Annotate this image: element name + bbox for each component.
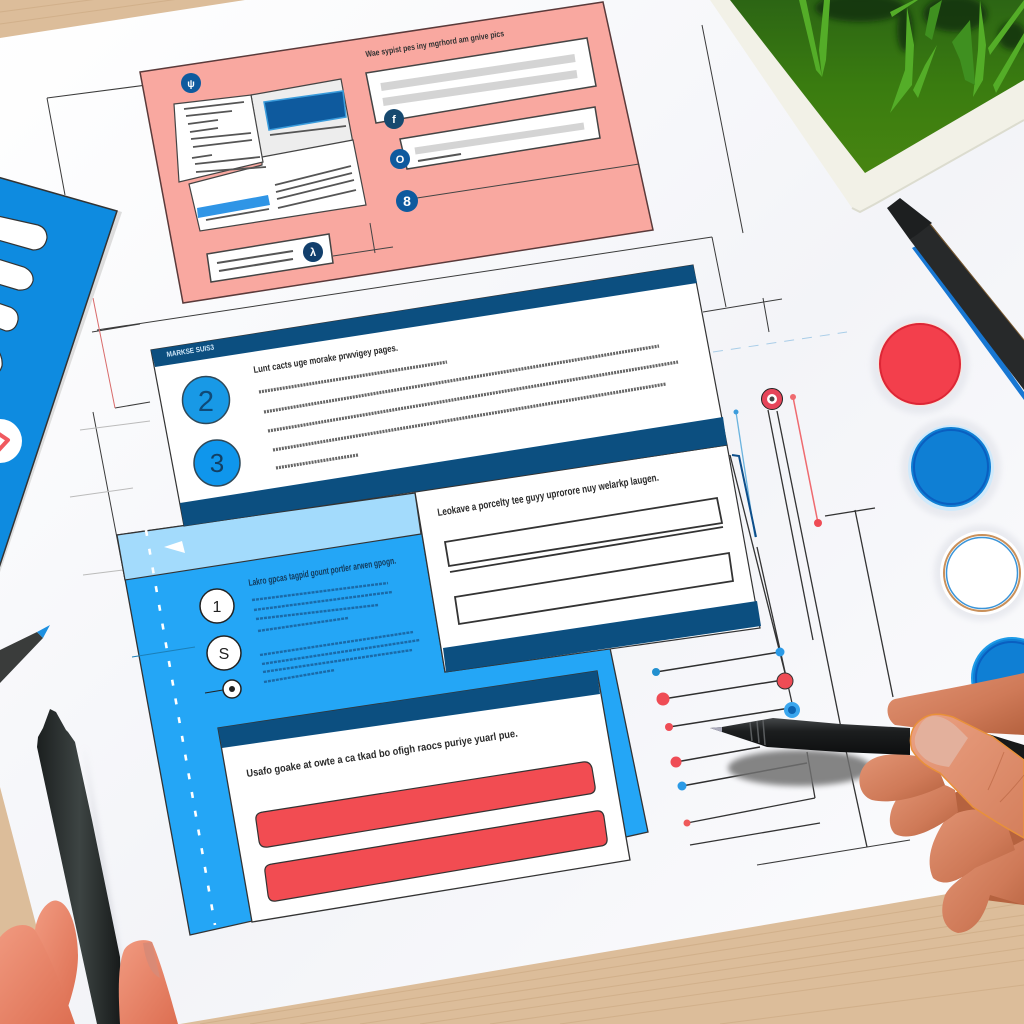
- red ring marker top: [762, 388, 782, 410]
- wireframe document: [174, 79, 366, 231]
- number badge: [396, 190, 418, 212]
- step 1: 1: [213, 599, 222, 616]
- panel: pink top section: [140, 2, 653, 303]
- construction guide lines: [47, 25, 910, 865]
- timeline connectors: [652, 388, 893, 847]
- panel: blue lower section: [117, 493, 648, 935]
- step 3: [194, 440, 240, 486]
- thumb: [910, 714, 1024, 838]
- navy header label: MARKSE SUIS3: [166, 343, 215, 359]
- swatch red: [871, 316, 969, 414]
- form field two: [455, 553, 733, 624]
- pen shadow: [728, 750, 872, 786]
- dark grass shadows: [815, 0, 1024, 52]
- leader lines: [333, 164, 639, 256]
- step S: S: [219, 646, 229, 663]
- hand lower left: [0, 901, 178, 1024]
- step 3: 3: [210, 448, 224, 478]
- blue panel heading: Lakro gpcas tagpid gount portler arwen gpogn.: [248, 556, 397, 589]
- grass tray: [710, 0, 1024, 212]
- inner card heading: Usafo goake at owte a ca tkad bo ofigh raocs puriye yuarl pue.: [246, 728, 518, 780]
- form heading: Leokave a porcelty tee guyy uprorore nuy welarkp laugen.: [437, 472, 660, 519]
- white text box two: [400, 107, 600, 169]
- swatch white ring: [934, 525, 1024, 621]
- swatch blue partial: [972, 638, 1024, 718]
- white text box one: [366, 38, 596, 123]
- inner white card: [218, 671, 630, 922]
- icon badge: [384, 109, 404, 129]
- blue panel paragraph two: [260, 632, 420, 682]
- swatch blue: [901, 418, 1001, 518]
- dashed guide: [146, 530, 215, 925]
- icon badge: ψ: [187, 79, 195, 90]
- lower fingers: [859, 754, 1024, 933]
- card badge icon: [0, 419, 22, 463]
- step dot: [205, 680, 241, 698]
- form field one: [445, 498, 723, 572]
- navy footer bar: [180, 417, 727, 526]
- arrow marker: [164, 541, 185, 553]
- pen far left: [0, 625, 50, 683]
- step 1: [200, 589, 234, 623]
- step S: [207, 636, 241, 670]
- blue card on left edge: [0, 176, 122, 590]
- step 2: [182, 376, 230, 424]
- grass blades: [799, 0, 1024, 113]
- index finger: [888, 673, 1024, 735]
- step 2: 2: [198, 386, 214, 418]
- red ring marker lower: [777, 673, 793, 689]
- section heading: Lunt cacts uge morake prwvigey pages.: [253, 343, 399, 376]
- marker dots: [652, 394, 822, 826]
- icon badge: λ: [310, 247, 316, 259]
- thumbnail: [915, 716, 968, 767]
- palm: [950, 760, 1024, 905]
- panel: navy header section: [151, 265, 727, 526]
- horizontal pen: [710, 718, 1024, 760]
- colour swatches: [871, 316, 1024, 718]
- icon badge: O: [396, 154, 405, 166]
- panel: right white form section: [415, 445, 761, 672]
- icon badge: [390, 149, 410, 169]
- red bar one: [256, 762, 595, 847]
- red bar two: [265, 811, 607, 901]
- icon badge: [303, 242, 323, 262]
- card pill buttons: [0, 216, 47, 372]
- thumb nail: [143, 942, 160, 978]
- wavy text lines: [259, 346, 678, 468]
- hand holding pen right: [710, 673, 1024, 933]
- blue panel paragraph one: [252, 583, 392, 631]
- blue ring marker: [784, 702, 800, 718]
- pink panel heading: Wae sypist pes iny mgrhord am gnive pics: [365, 28, 505, 59]
- form navy footer: [443, 601, 761, 672]
- navy header bar: [151, 265, 697, 367]
- inner card navy header: [218, 671, 600, 748]
- icon badge: [181, 73, 201, 93]
- icon badge: f: [392, 114, 396, 126]
- number badge: 8: [403, 193, 411, 209]
- pen top right: [887, 198, 1024, 400]
- white label box three: [207, 234, 333, 282]
- light blue header band: [117, 493, 421, 580]
- pen lower left: [37, 709, 140, 1024]
